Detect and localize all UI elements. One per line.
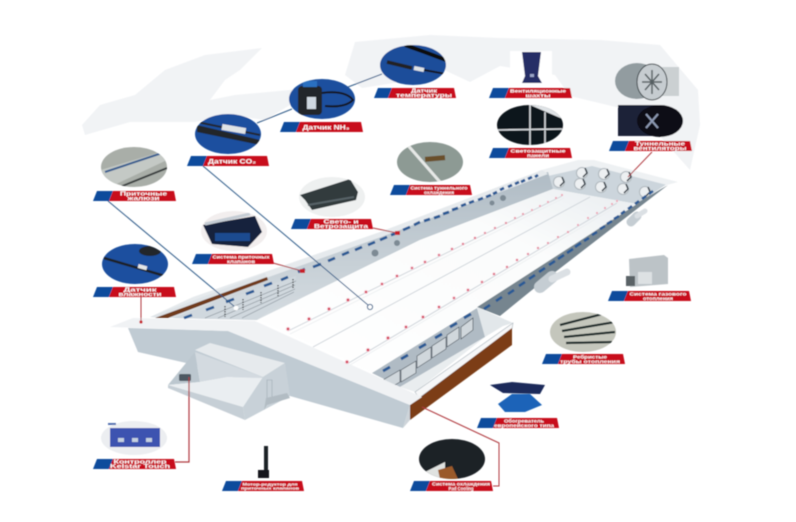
label: finned pipes: трубы отопления — [560, 359, 621, 364]
controller on the box — [179, 374, 191, 381]
label: tunnel cooling: охлаждения — [424, 190, 455, 195]
photo: tunnel fan top — [615, 63, 679, 100]
leader: pad cooling — [422, 407, 499, 486]
leader: inlet louvers — [108, 201, 235, 307]
red dots — [286, 194, 618, 364]
label: ventilation shafts: Вентиляционные — [510, 89, 567, 94]
grilles on box wall — [383, 318, 473, 392]
label: tunnel fans — [609, 141, 692, 152]
photo: inlet valves — [201, 211, 267, 251]
label: NH3 sensor: Датчик NH₃ — [302, 125, 350, 131]
label: pad cooling: Система охлаждения — [432, 482, 491, 487]
photo: gas heater — [626, 255, 668, 287]
label: ventilation shafts: шахты — [526, 93, 551, 98]
label: tunnel fans: вентиляторы — [634, 146, 686, 152]
entrance box — [195, 343, 285, 377]
brown cooling pad — [410, 328, 512, 420]
roof band — [110, 318, 422, 405]
leader: tunnel fans — [628, 152, 652, 177]
label: european heater: Обогреватель — [504, 419, 544, 424]
connector lines — [257, 74, 382, 123]
far end wall — [548, 163, 667, 204]
label: light and wind protection — [291, 219, 373, 230]
photo: tunnel fan bottom — [618, 105, 683, 137]
floor — [257, 189, 637, 373]
photo: ventilation shaft — [510, 51, 552, 85]
label: pad cooling: Pad Cooling — [448, 486, 474, 491]
photo: light and wind protection — [299, 177, 365, 217]
photo: controller — [101, 421, 167, 455]
infographic: poultry house equipment diagram — [82, 35, 700, 492]
photo: european heater — [490, 382, 545, 412]
left wall band — [172, 172, 553, 320]
far roof — [538, 160, 678, 185]
building: poultry house — [110, 160, 678, 428]
label: inlet louvers: Приточные — [120, 192, 167, 198]
photo: CO2 sensor — [195, 114, 261, 154]
label: inlet valves: Система приточных — [212, 255, 270, 260]
label: humidity sensor: Датчик — [124, 288, 157, 294]
photo: humidity sensor — [102, 244, 168, 284]
label: european heater: европейского типа — [494, 423, 555, 428]
label: pad cooling — [410, 481, 493, 491]
label: light and wind protection: Ветрозащита — [314, 224, 368, 230]
label: controller — [93, 459, 176, 470]
label: humidity sensor — [93, 287, 176, 298]
label: motor reducer: приточных клапанов — [241, 486, 300, 491]
left grilles — [172, 276, 296, 320]
label: inlet louvers — [93, 191, 176, 202]
vents on box wall — [383, 314, 471, 371]
photo: tunnel cooling — [397, 142, 463, 182]
photo: NH3 sensor — [289, 79, 355, 119]
label: european heater — [477, 418, 559, 428]
label: gas heating — [608, 291, 691, 301]
left wall vents — [184, 175, 538, 318]
leader: wind protection — [373, 228, 397, 233]
label: gas heating: отопления — [643, 296, 674, 301]
label: light protection panels: панели — [527, 153, 550, 158]
label: tunnel cooling — [390, 185, 472, 195]
label: CO2 sensor: Датчик CO₂ — [208, 159, 256, 165]
label: inlet valves: клапанов — [227, 259, 256, 264]
label: motor reducer: Мотор-редуктор для — [242, 482, 298, 487]
label: tunnel cooling: Система туннельного — [410, 186, 468, 191]
leader end markers — [139, 231, 400, 324]
side pipes — [540, 211, 645, 287]
leader: inlet valves — [273, 263, 302, 271]
label: temperature sensor: Датчик — [411, 89, 438, 95]
label: light and wind protection: Свето- и — [324, 220, 358, 226]
leader: humidity sensor — [140, 297, 142, 322]
label: controller: Kelstar Touch — [110, 464, 170, 470]
label: CO2 sensor — [187, 156, 269, 166]
label: temperature sensor — [374, 88, 456, 99]
wall circles — [372, 195, 506, 256]
front wall — [128, 328, 410, 428]
label: humidity sensor: влажности — [118, 292, 162, 298]
photo: motor reducer — [258, 446, 269, 478]
photo: finned heating pipes — [550, 312, 616, 352]
label: finned pipes — [542, 354, 625, 364]
right wall vents — [484, 191, 653, 309]
label: inlet louvers: жалюзи — [126, 196, 160, 202]
label: ventilation shafts — [489, 88, 572, 98]
label: gas heating: Система газового — [630, 292, 687, 297]
right pad box — [372, 307, 513, 420]
label: temperature sensor: температуры — [396, 93, 452, 99]
world map background — [82, 35, 700, 170]
tunnel fans — [554, 168, 650, 198]
photo: light protection panels — [497, 105, 565, 145]
label: controller: Контроллер — [114, 460, 166, 466]
right outer wall — [477, 185, 668, 316]
label: NH3 sensor — [280, 122, 363, 132]
label: tunnel fans: Туннельные — [635, 142, 685, 148]
leader: CO2 sensor — [203, 166, 368, 305]
left pad box — [150, 273, 268, 318]
leader: controller — [175, 377, 189, 462]
photo: temperature sensor — [380, 45, 446, 85]
leader lines — [108, 152, 652, 486]
label: inlet valves — [192, 254, 274, 264]
floor strips — [288, 196, 619, 365]
label: light protection panels — [489, 148, 572, 158]
label: light protection panels: Светозащитные — [510, 149, 567, 154]
photo: inlet louvers — [101, 147, 167, 187]
label: finned pipes: Ребристые — [573, 355, 608, 360]
label: motor reducer — [222, 481, 304, 491]
photo: pad cooling — [419, 439, 485, 480]
